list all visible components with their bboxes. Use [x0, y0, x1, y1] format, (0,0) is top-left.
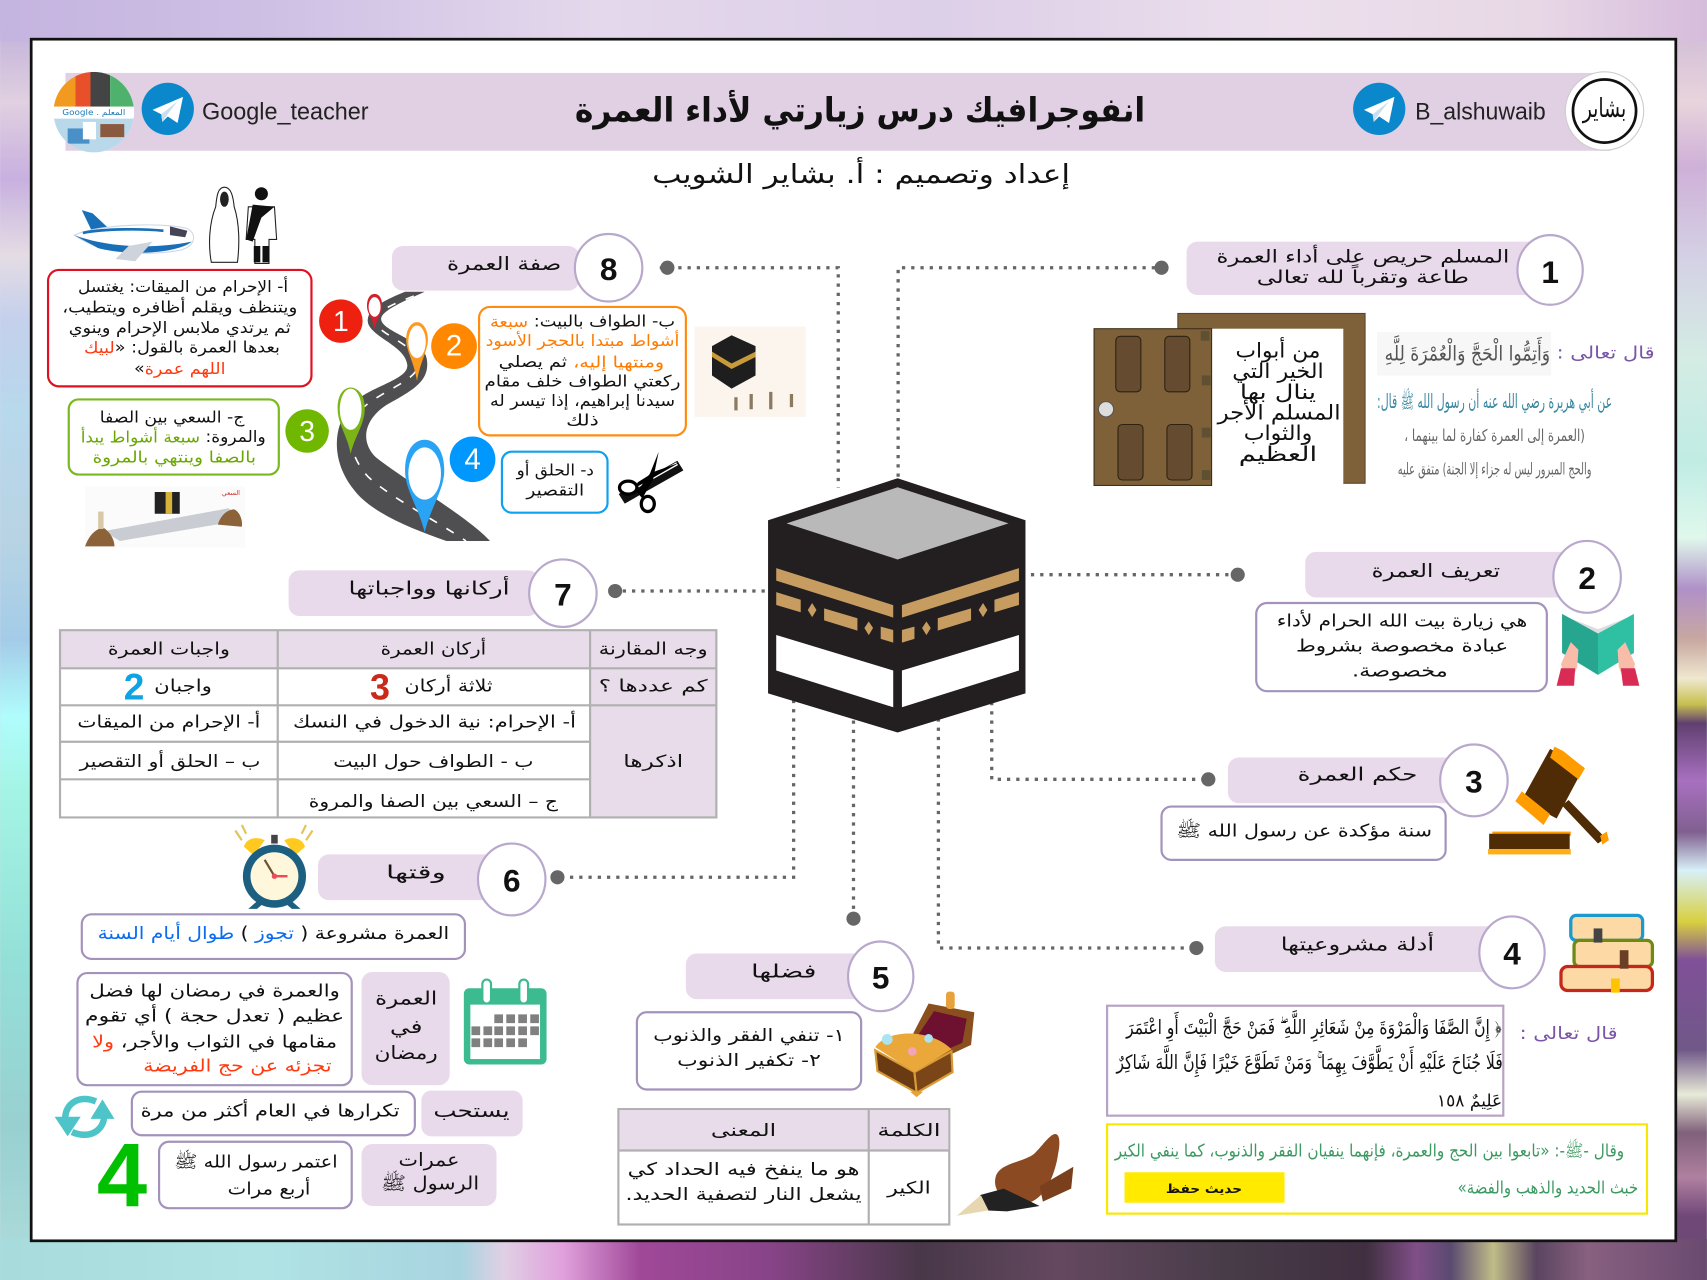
- pill heading 7: أركانها وواجباتها: [348, 575, 510, 599]
- step 2 box: ب- الطواف بالبيت: سبعة: [490, 312, 675, 332]
- virtues box: ١- تنفي الفقر والذنوب: [653, 1026, 845, 1046]
- quran and hadith quote: [1377, 332, 1655, 480]
- section 7: [60, 559, 716, 817]
- icon: author logo: [1565, 72, 1644, 150]
- quran and hadith quote: (العمرة إلى العمرة كفارة لما بينهما ،: [1404, 426, 1585, 446]
- step 3 box: ج- السعي بين الصفا: [100, 407, 245, 427]
- prophet umrah label: الرسول ﷺ: [381, 1170, 479, 1195]
- comparison table: 3: [370, 666, 390, 707]
- number 2: [1553, 541, 1621, 613]
- icon: airplane: [74, 210, 194, 261]
- door text: العظيم: [1239, 442, 1317, 466]
- verse label: قال تعالى :: [1520, 1024, 1618, 1044]
- step 3 box: [69, 399, 279, 475]
- permissibility box: العمرة مشروعة ( تجوز ) طوال أيام السنة: [98, 922, 449, 944]
- hadith box: وقال -ﷺ-: «تابعوا بين الحج والعمرة، فإنهما ينفيان الفقر والذنوب، كما ينفي الكير: [1114, 1138, 1624, 1162]
- number 5: 5: [872, 959, 889, 995]
- word meaning table: [618, 1109, 949, 1224]
- icon: treasure chest: [875, 992, 974, 1097]
- step 1 box: أ- الإحرام من الميقات: يغتسل: [78, 276, 288, 297]
- section 8: [48, 187, 806, 547]
- verse box: فَلَا جُنَاحَ عَلَيْهِ أَنْ يَطَّوَّفَ بِهِمَا ۚ وَمَنْ تَطَوَّعَ خَيْرًا فَإِنَّ اللَّهَ شَاكِرٌ: [1116, 1044, 1503, 1078]
- hadith box: حديث حفظ: [1166, 1181, 1242, 1196]
- word meaning table: يشعل النار لتصفية الحديد.: [625, 1185, 862, 1205]
- step 3 box: والمروة: سبعة أشواط يبدأ: [81, 426, 266, 447]
- repetition box: تكرارها في العام أكثر من مرة: [141, 1099, 400, 1121]
- recommended label: يستحب: [433, 1101, 510, 1122]
- pill heading 8: [392, 246, 579, 291]
- recommended label: [421, 1091, 523, 1136]
- big number four: 4: [97, 1125, 147, 1226]
- section 1: [1094, 235, 1655, 485]
- icon: scissors and comb: [619, 452, 683, 512]
- step 2 marker: 2: [446, 330, 462, 363]
- step 1 marker: [319, 294, 382, 343]
- ramadan text box: والعمرة في رمضان لها فضل: [89, 982, 340, 1002]
- step 1 marker: 1: [333, 305, 349, 337]
- section 5: [618, 941, 1073, 1224]
- pill heading 3: حكم العمرة: [1298, 764, 1417, 785]
- prophet umrah label: [362, 1144, 496, 1206]
- number 6: [478, 844, 545, 915]
- icon: alarm clock: [235, 825, 313, 909]
- pill heading 6: وقتها: [386, 862, 446, 883]
- number 4: [1479, 916, 1545, 988]
- step 4 box: [502, 452, 608, 513]
- virtues box: [637, 1012, 861, 1090]
- step 2 box: ذلك: [566, 411, 599, 430]
- comparison table: أركان العمرة: [381, 638, 486, 659]
- pill heading 5: فضلها: [751, 961, 816, 982]
- pill heading 1: [1187, 242, 1548, 295]
- ramadan text box: عظيم ( تعدل حجة ) أي تقوم: [85, 1005, 344, 1027]
- step 4 box: التقصير: [525, 480, 584, 500]
- step 3 box: بالصفا وينتهي بالمروة: [93, 448, 256, 468]
- section 3: [1162, 744, 1609, 860]
- subtitle: إعداد وتصميم : أ. بشاير الشويب: [652, 156, 1070, 190]
- number 7: [529, 559, 597, 627]
- word meaning table: الكير: [886, 1177, 931, 1197]
- quran and hadith quote: قال تعالى :: [1557, 344, 1655, 364]
- icon: bellows: [957, 1134, 1073, 1216]
- word meaning table: هو ما ينفخ فيه الحداد كي: [628, 1160, 859, 1180]
- comparison table: وجه المقارنة: [599, 639, 708, 659]
- comparison table: 2: [124, 666, 144, 707]
- comparison table: ب – الحلق أو التقصير: [78, 750, 260, 771]
- virtues box: ٢- تكفير الذنوب: [677, 1051, 821, 1071]
- definition box: مخصوصة.: [1352, 662, 1448, 682]
- icon: left channel logo: المعلم . Google: [62, 107, 125, 117]
- ramadan text box: [77, 973, 352, 1085]
- definition box: عبادة مخصوصة بشروط: [1296, 637, 1508, 657]
- number 1: 1: [1541, 254, 1559, 290]
- number 8: 8: [600, 251, 617, 287]
- door text: ينال بها: [1240, 380, 1316, 404]
- section 4: [1107, 915, 1652, 1214]
- permissibility box: [82, 914, 465, 959]
- verse box: عَلِيمٌ ١٥٨: [1437, 1091, 1502, 1111]
- ruling box: [1162, 807, 1446, 860]
- number 8: [575, 234, 642, 301]
- comparison table: [60, 630, 716, 817]
- number 1: [1517, 235, 1583, 305]
- number 7: 7: [554, 576, 572, 612]
- door text: الخير التي: [1232, 359, 1324, 383]
- number 2: 2: [1578, 560, 1596, 596]
- step 1 box: [48, 270, 311, 386]
- icon: repeat arrows: [55, 1099, 114, 1136]
- pill heading 3: [1228, 758, 1474, 803]
- picture: tawaf around kaaba: [695, 327, 806, 417]
- step 1 box: اللهم عمرة»: [134, 358, 225, 378]
- picture: safa and marwa: السعي: [222, 489, 240, 497]
- number 3: 3: [1465, 763, 1483, 799]
- step 1 box: بعدها العمرة بالقول: «لبيك: [84, 338, 280, 358]
- number 6: 6: [503, 863, 521, 899]
- comparison table: ب - الطواف حول البيت: [333, 751, 533, 771]
- text: right handle: B_alshuwaib: [1415, 99, 1546, 126]
- section 2: [1256, 541, 1639, 691]
- step 4 box: د- الحلق أو: [516, 460, 594, 481]
- icon: author logo: بشاير: [1581, 94, 1626, 124]
- comparison table: أ- الإحرام من الميقات: [77, 711, 260, 732]
- word meaning table: المعنى: [711, 1120, 776, 1140]
- step 2 box: ركعتي الطواف خلف مقام: [485, 371, 680, 391]
- comparison table: واجبات العمرة: [108, 639, 230, 659]
- step 4 marker: [405, 436, 495, 532]
- icon: stack of books: [1561, 915, 1652, 993]
- pill heading 1: طاعة وتقرباً لله تعالى: [1257, 264, 1469, 288]
- pill heading 5: [686, 953, 883, 999]
- icon: telegram left: [142, 83, 194, 135]
- hadith box: [1107, 1124, 1647, 1214]
- comparison table: أ- الإحرام: نية الدخول في النسك: [293, 711, 576, 733]
- comparison table: كم عددها ؟: [599, 676, 709, 697]
- door text: [1216, 336, 1341, 466]
- road illustration: [337, 292, 490, 541]
- icon: calendar: [464, 980, 547, 1064]
- door text: المسلم الأجر: [1216, 400, 1341, 425]
- icon: gavel: [1488, 747, 1609, 854]
- ruling box: سنة مؤكدة عن رسول الله ﷺ: [1176, 818, 1432, 842]
- step 2 box: [479, 307, 686, 435]
- prophet umrah label: عمرات: [399, 1150, 459, 1171]
- comparison table: ج – السعي بين الصفا والمروة: [309, 791, 558, 812]
- pill heading 2: [1305, 552, 1586, 598]
- connector lines: [550, 261, 1245, 955]
- quran and hadith quote: وَأَتِمُّوا الْحَجَّ وَالْعُمْرَةَ لِلَّهِ: [1385, 335, 1550, 366]
- ramadan label: رمضان: [375, 1043, 438, 1064]
- step 1 box: ثم يرتدي ملابس الإحرام وينوي: [69, 318, 291, 338]
- pill heading 1: المسلم حريص على أداء العمرة: [1216, 244, 1509, 267]
- door text: والثواب: [1244, 421, 1312, 445]
- repetition box: [132, 1092, 415, 1135]
- pill heading 4: أدلة مشروعيتها: [1281, 931, 1434, 955]
- icon: left channel logo: [54, 72, 134, 153]
- step 2 marker: [406, 322, 477, 381]
- definition box: [1256, 603, 1547, 691]
- icon: open book: [1557, 614, 1639, 686]
- step 2 box: ومنتهيا إليه، ثم يصلي: [499, 352, 664, 372]
- definition box: هي زيارة بيت الله الحرام لأداء: [1277, 609, 1527, 631]
- picture: safa and marwa: [85, 487, 245, 547]
- pill heading 7: [289, 570, 539, 616]
- number 3: [1440, 744, 1508, 816]
- comparison table: اذكرها: [623, 751, 683, 771]
- verse box: [1107, 1006, 1503, 1116]
- pill heading 2: تعريف العمرة: [1372, 561, 1500, 582]
- word meaning table: الكلمة: [877, 1120, 941, 1140]
- step 3 marker: 3: [299, 415, 315, 447]
- door text: من أبواب: [1236, 336, 1320, 362]
- icon: pilgrim couple: [210, 187, 277, 263]
- verse box: ﴿ إِنَّ الصَّفَا وَالْمَرْوَةَ مِنْ شَعَائِرِ اللَّهِ ۖ فَمَنْ حَجَّ الْبَيْتَ أَوِ اعْتَمَرَ: [1125, 1009, 1502, 1042]
- central kaaba icon: [768, 478, 1025, 733]
- step 4 marker: 4: [464, 443, 481, 476]
- prophet umrah box: [159, 1142, 352, 1208]
- section 6: [55, 825, 547, 1226]
- door illustration: [1094, 313, 1365, 485]
- icon: telegram right: [1353, 83, 1405, 135]
- hadith box: خبث الحديد والذهب والفضة»: [1458, 1179, 1638, 1199]
- prophet umrah box: أربع مرات: [228, 1178, 310, 1200]
- ramadan text box: تجزئه عن حج الفريضة: [143, 1057, 332, 1077]
- ramadan text box: مقامها في الثواب والأجر، ولا: [92, 1031, 337, 1053]
- step 3 marker: [285, 387, 365, 454]
- text: left handle: Google_teacher: [202, 99, 369, 126]
- title: انفوجرافيك درس زيارتي لأداء العمرة: [575, 88, 1145, 130]
- ramadan label: العمرة: [375, 989, 437, 1010]
- pill heading 8: صفة العمرة: [447, 254, 561, 275]
- header band: [54, 72, 1644, 153]
- step 1 box: ويتنظف ويقلم أظافره ويتطيب،: [62, 296, 297, 317]
- step 2 box: أشواط مبتدا بالحجر الأسود: [486, 330, 679, 351]
- prophet umrah box: اعتمر رسول الله ﷺ: [174, 1148, 338, 1172]
- ramadan label: [362, 972, 450, 1085]
- comparison table: واجبان: [154, 676, 212, 696]
- ramadan label: في: [390, 1017, 422, 1038]
- pill heading 6: [318, 854, 514, 900]
- step 2 box: سيدنا إبراهيم، إذا تيسر له: [490, 391, 675, 411]
- comparison table: ثلاثة أركان: [405, 675, 493, 696]
- number 5: [848, 941, 913, 1011]
- number 4: 4: [1503, 935, 1521, 971]
- pill heading 4: [1215, 926, 1513, 972]
